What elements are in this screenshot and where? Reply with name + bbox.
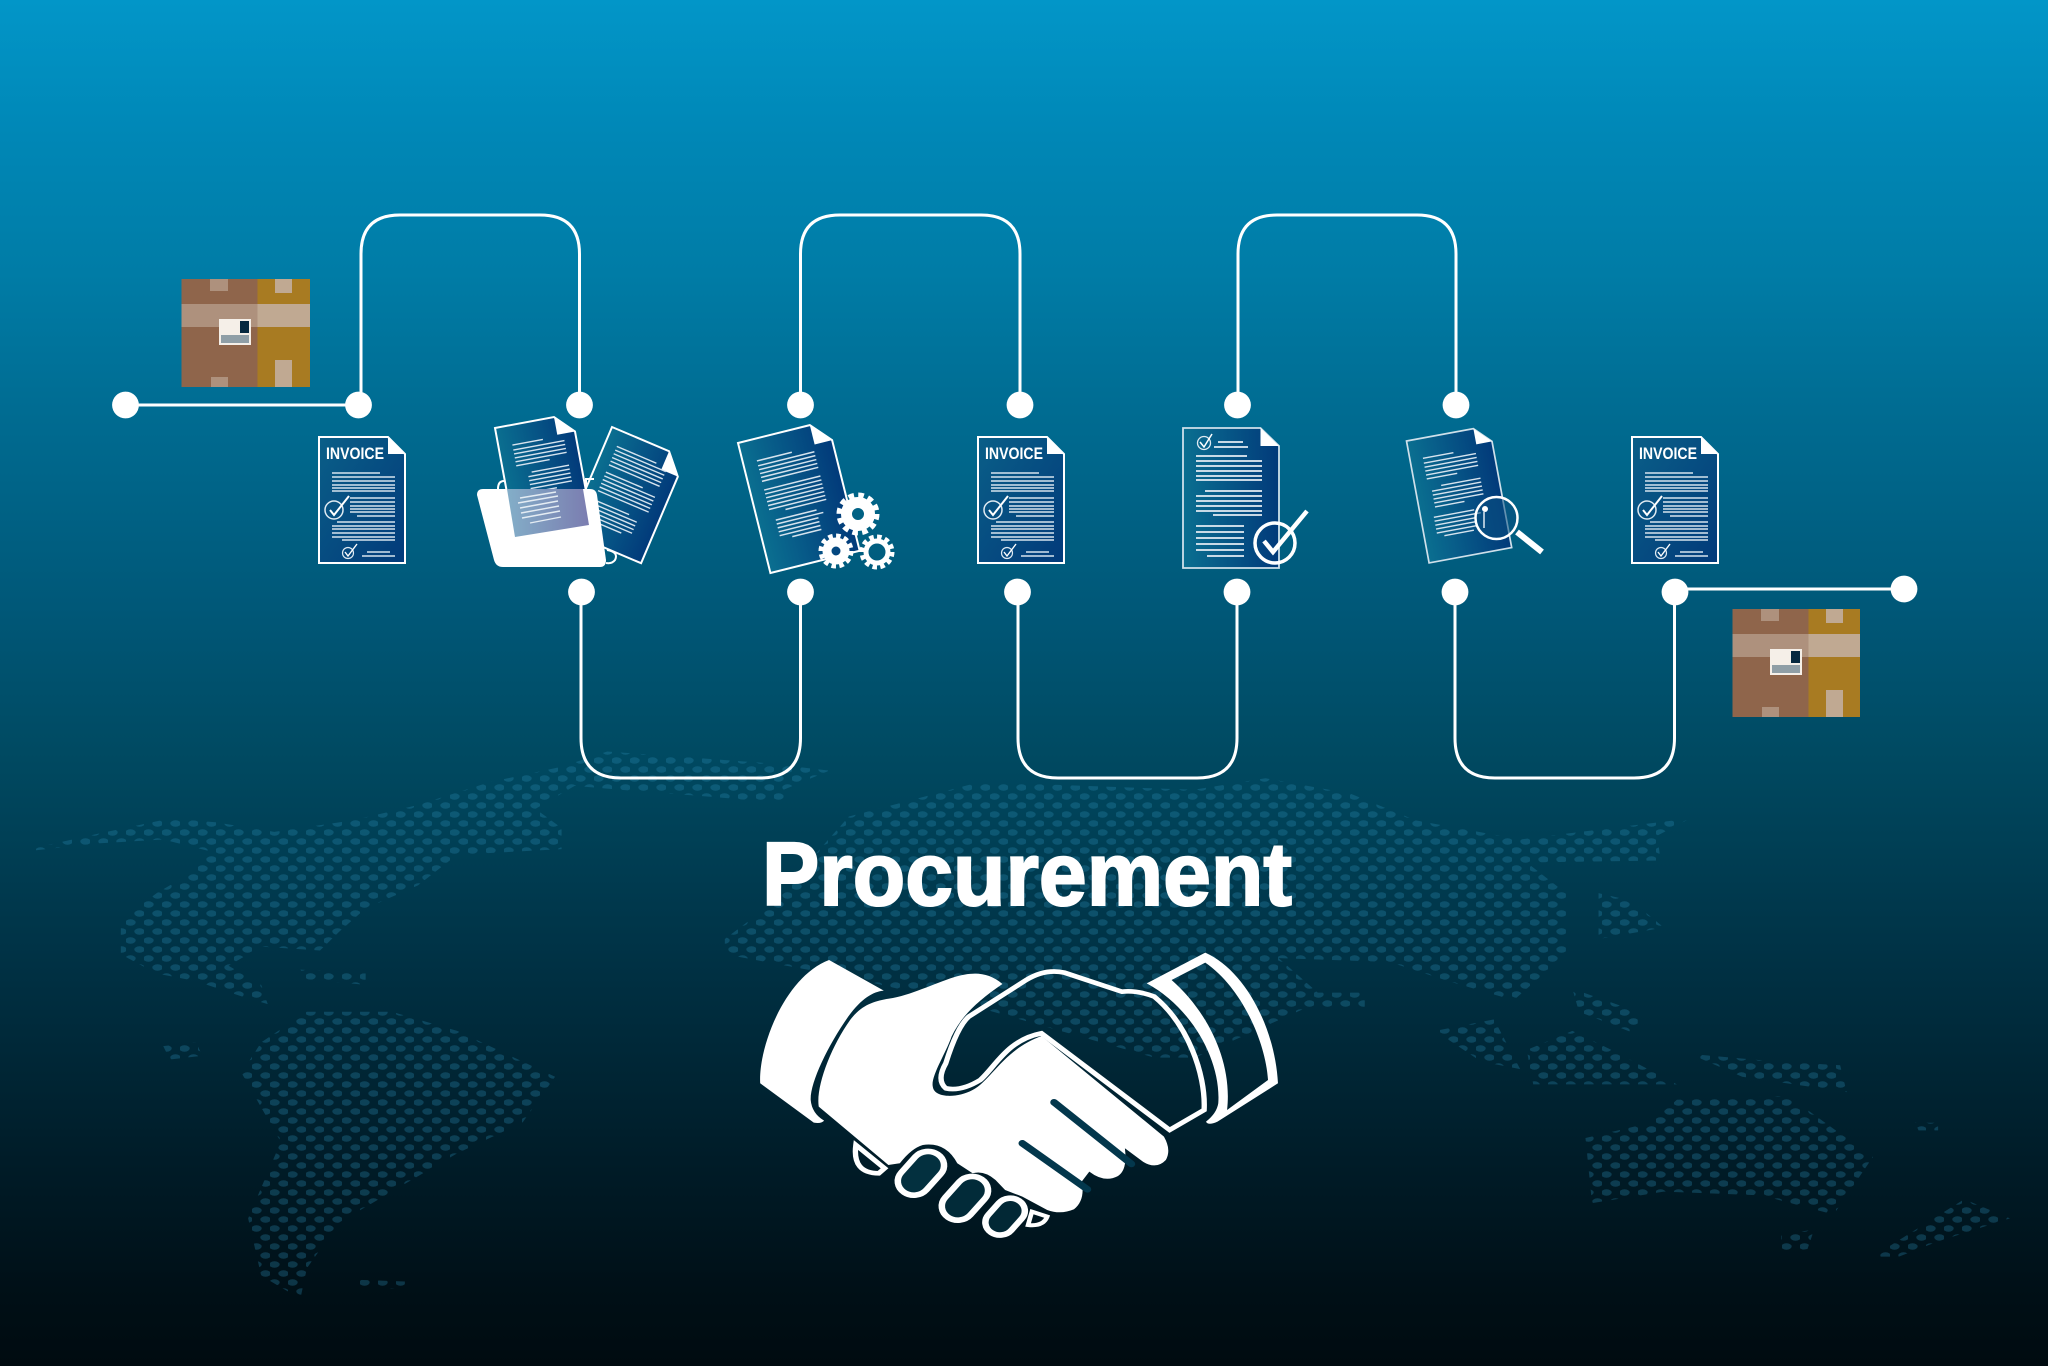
icon: invoice document 3 [1632, 437, 1718, 563]
icon: invoice document 2: INVOICE [985, 445, 1043, 463]
front document [495, 414, 592, 536]
right hand outline [941, 971, 1204, 1130]
finger rings [891, 1146, 1031, 1240]
process flow line with nodes [112, 215, 1917, 778]
icon: document with gears [738, 421, 892, 573]
icon: documents in folder [477, 414, 686, 567]
finger gaps [1022, 1102, 1131, 1189]
right cuff [1147, 953, 1278, 1124]
icon: invoice document 3: INVOICE [1639, 445, 1697, 463]
icon: invoice document 2 [978, 437, 1064, 563]
small fingertips [855, 1145, 885, 1173]
icon: document with check mark [1183, 428, 1307, 568]
icon: invoice document 1 [319, 437, 405, 563]
dotted world map [36, 752, 2010, 1295]
title: Procurement [762, 825, 1292, 925]
left hand [818, 974, 1168, 1212]
back document [567, 427, 686, 563]
icon: invoice document 1: INVOICE [326, 445, 384, 463]
icon: cardboard box (end) [1732, 609, 1860, 717]
icon: handshake [760, 953, 1278, 1240]
translucent document part [507, 489, 589, 537]
document lines in folder [518, 492, 561, 523]
icon: cardboard box (start) [182, 279, 310, 387]
folder [477, 489, 606, 567]
icon: document with magnifier [1406, 426, 1542, 563]
left cuff [760, 960, 884, 1123]
folder rings [498, 479, 616, 563]
gears [821, 496, 892, 567]
